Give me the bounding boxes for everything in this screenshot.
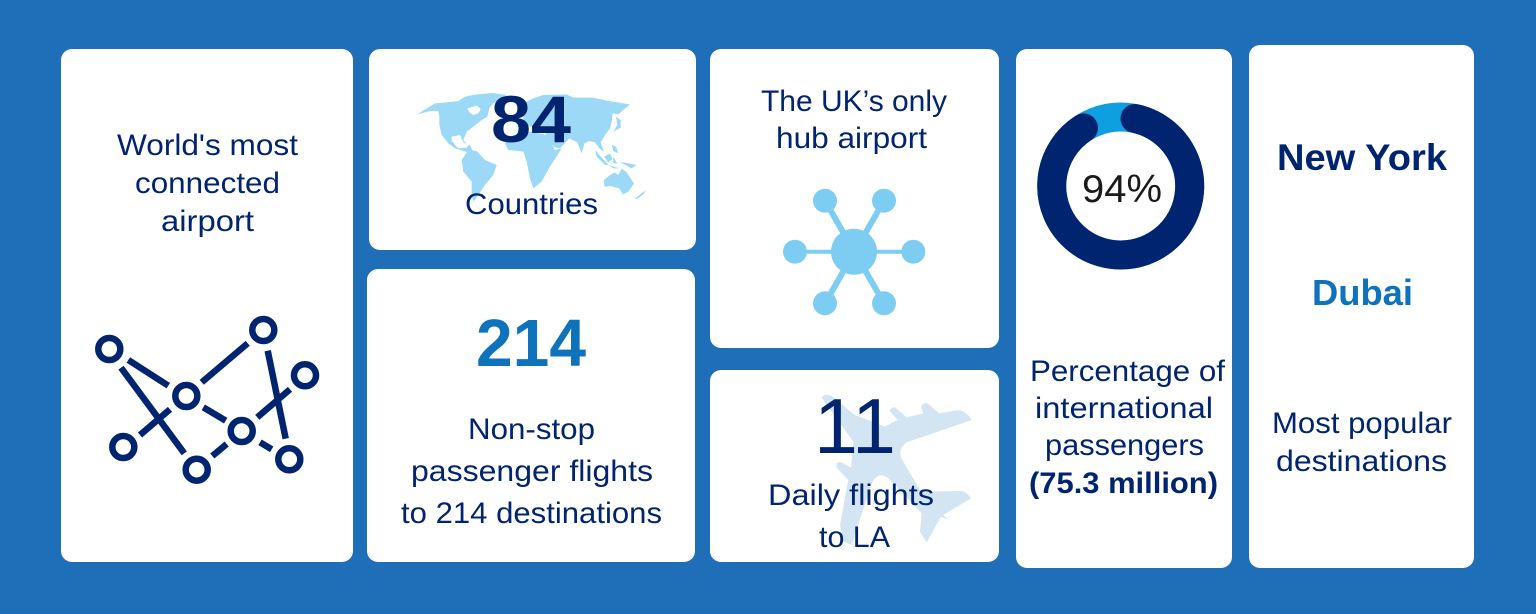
icon: world map bbox=[417, 93, 646, 202]
stat: 94%: 94% bbox=[1082, 168, 1162, 211]
text: daily flights to LA bbox=[768, 479, 934, 554]
text: percentage of international passengers bbox=[1029, 355, 1226, 500]
panel: 94 percent international passengers bbox=[1016, 49, 1232, 568]
stat: 11: 11 bbox=[814, 382, 896, 470]
text: most popular destinations: destinations bbox=[1276, 445, 1447, 478]
panel: 214 non-stop flights bbox=[367, 269, 695, 562]
heading: world's most connected airport: connected bbox=[135, 167, 280, 200]
heading: the UK's only hub airport: hub airport bbox=[776, 122, 928, 155]
destination: New York: New York bbox=[1277, 137, 1447, 178]
icon: network of linked nodes bbox=[98, 319, 316, 481]
heading: the UK's only hub airport: The UK’s only bbox=[761, 85, 947, 118]
stat: 214: 214 bbox=[476, 306, 586, 381]
heading: world's most connected airport: airport bbox=[161, 205, 255, 238]
panel: UK's only hub airport bbox=[710, 49, 999, 348]
text: non-stop passenger flights to 214 destinations: to 214 destinations bbox=[401, 497, 662, 530]
panel: 84 countries bbox=[369, 49, 696, 250]
text: daily flights to LA: to LA bbox=[819, 521, 890, 554]
text: non-stop passenger flights to 214 destinations: Non-stop bbox=[468, 413, 595, 446]
text: daily flights to LA: Daily flights bbox=[768, 479, 934, 512]
donut chart: 94% bbox=[1052, 117, 1190, 255]
text: most popular destinations bbox=[1272, 407, 1452, 478]
text: non-stop passenger flights to 214 destinations bbox=[401, 413, 662, 530]
text: percentage of international passengers: (75.3 million) bbox=[1029, 467, 1218, 500]
panel: 11 daily flights to LA bbox=[710, 370, 999, 562]
text: percentage of international passengers: passengers bbox=[1045, 429, 1204, 462]
heading: world's most connected airport: World's most bbox=[117, 129, 299, 162]
stat: 84: 84 bbox=[491, 82, 571, 156]
icon: hub and spokes bbox=[783, 189, 925, 315]
text: most popular destinations: Most popular bbox=[1272, 407, 1452, 440]
text: non-stop passenger flights to 214 destinations: passenger flights bbox=[411, 455, 653, 488]
text: percentage of international passengers: international bbox=[1035, 392, 1213, 425]
label: countries: Countries bbox=[465, 188, 598, 221]
panel: most popular destinations bbox=[1249, 45, 1474, 568]
panel: world's most connected airport bbox=[61, 49, 353, 562]
heading: the UK's only hub airport bbox=[761, 85, 947, 155]
heading: world's most connected airport bbox=[117, 129, 299, 238]
destination: Dubai: Dubai bbox=[1312, 272, 1413, 313]
icon: airplane watermark bbox=[822, 395, 972, 545]
text: percentage of international passengers: Percentage of bbox=[1030, 355, 1226, 388]
